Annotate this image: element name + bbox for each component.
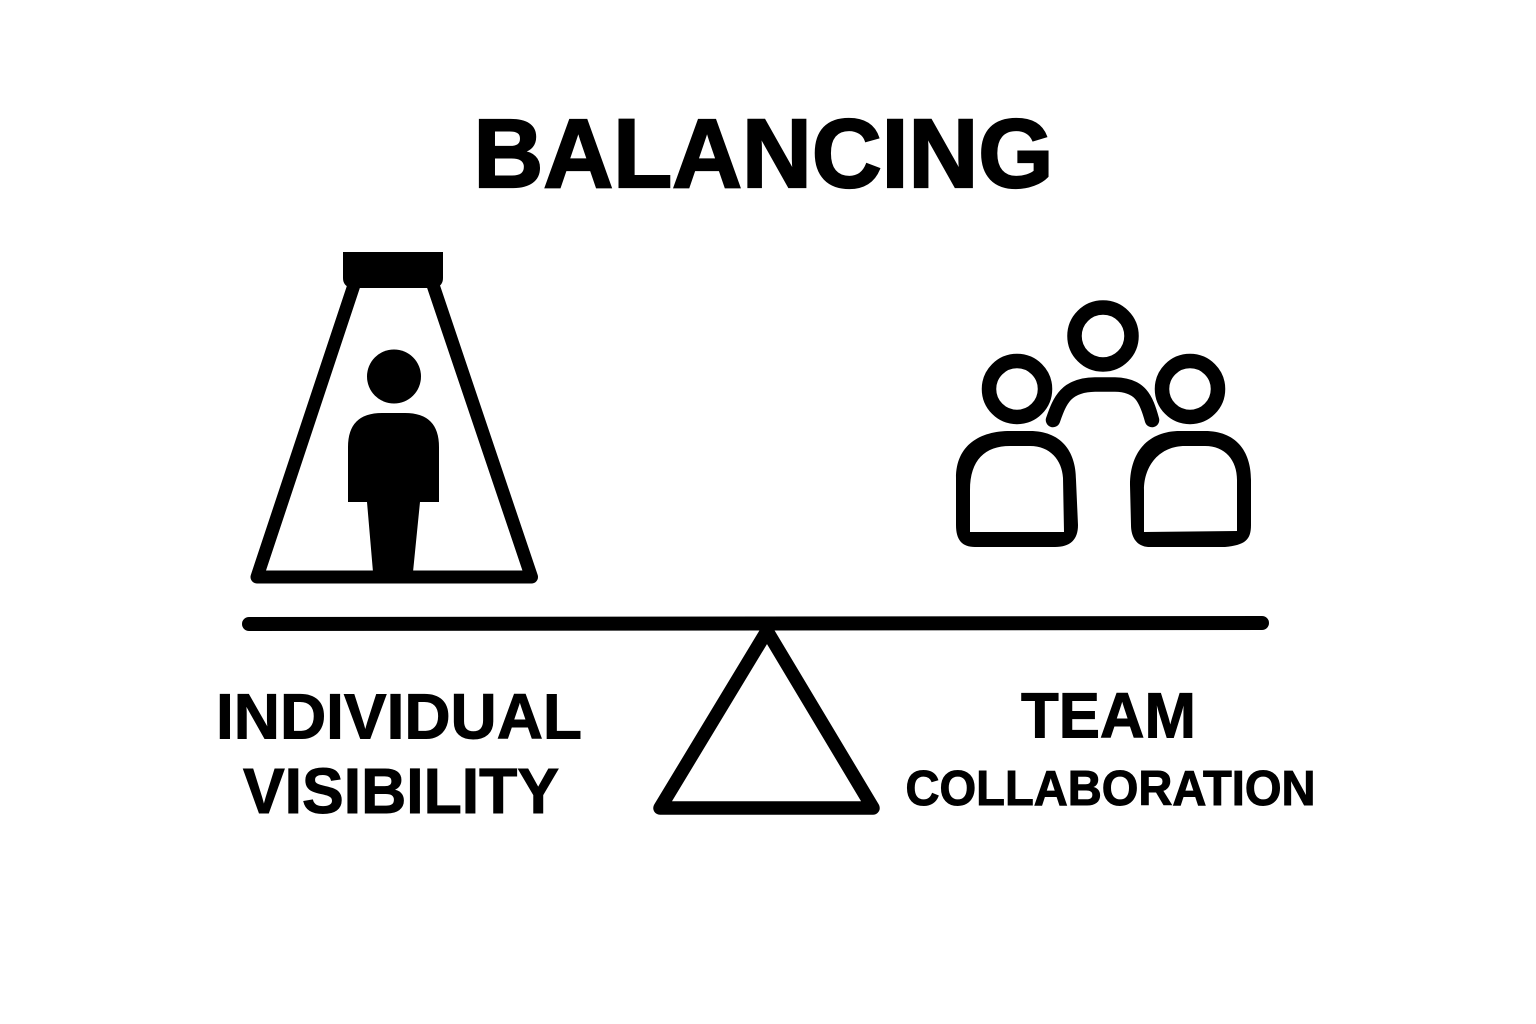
seesaw beam	[249, 623, 1262, 624]
label: individual visibility: INDIVIDUAL	[216, 680, 582, 752]
icon: spotlight on individual	[257, 252, 532, 577]
label: team collaboration	[906, 680, 1316, 816]
label: individual visibility: VISIBILITY	[243, 755, 559, 827]
label: team collaboration: TEAM	[1021, 680, 1196, 752]
title: BALANCING	[474, 99, 1054, 208]
label: team collaboration: COLLABORATION	[906, 762, 1316, 816]
label: individual visibility	[216, 680, 582, 827]
seesaw fulcrum	[660, 631, 873, 808]
icon: team of three people	[956, 308, 1251, 547]
